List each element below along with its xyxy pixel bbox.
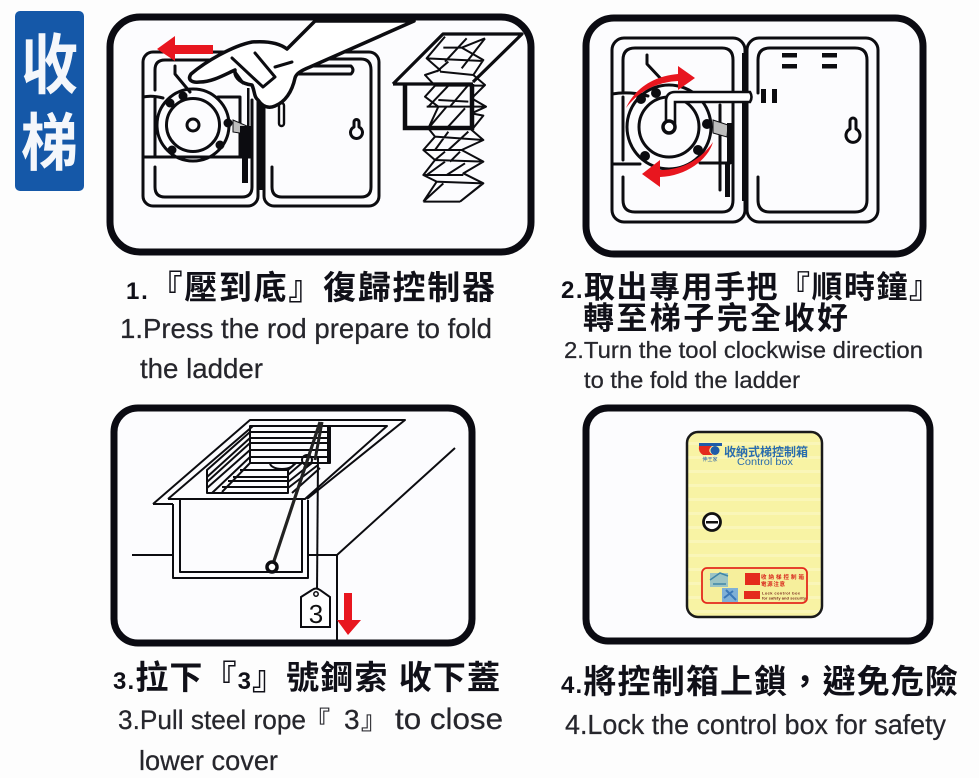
heading 2: 轉至梯子完全收好 bbox=[583, 301, 848, 336]
tag 3: 3 bbox=[309, 599, 323, 629]
left door bbox=[612, 38, 745, 222]
tag 3 bbox=[301, 588, 330, 629]
panel: step 3 pull steel rope bbox=[114, 408, 472, 643]
caption 3: 3 bbox=[344, 704, 360, 735]
logo: 伸王家 bbox=[702, 456, 718, 463]
panel: step 1 press the rod bbox=[110, 17, 531, 252]
red down arrow bbox=[337, 593, 361, 635]
folded ladder frame bbox=[393, 34, 522, 202]
heading 2: 2.取出專用手把『順時鐘』 bbox=[561, 270, 940, 305]
warning label bbox=[702, 568, 807, 603]
red clockwise arrow: bottom bbox=[642, 142, 713, 187]
hand pressing bbox=[190, 21, 414, 107]
caption 2 bbox=[564, 337, 923, 393]
caption 3: to close bbox=[395, 703, 503, 736]
badge: 收梯 (fold ladder): 收 bbox=[21, 29, 78, 103]
left door bbox=[143, 52, 258, 206]
ceiling frame bbox=[153, 420, 405, 504]
lock bbox=[704, 514, 720, 530]
hinge bbox=[742, 53, 748, 201]
control box bbox=[687, 432, 822, 617]
caption 1: 1.Press the rod prepare to fold bbox=[120, 313, 492, 344]
right door bbox=[747, 38, 878, 222]
box title: 收納式梯控制箱 bbox=[724, 444, 808, 459]
logo bbox=[699, 443, 722, 463]
right door bbox=[264, 52, 379, 206]
ladder zigzag folds bbox=[423, 37, 486, 202]
heading 3: 3.拉下『3』號鋼索 收下蓋 bbox=[113, 659, 500, 696]
panel: step 4 control box bbox=[586, 408, 930, 641]
heading 2 bbox=[561, 270, 940, 336]
badge: 收梯 (fold ladder): 梯 bbox=[21, 108, 78, 179]
panel: step 2 turn the tool bbox=[586, 18, 923, 254]
caption 1: the ladder bbox=[140, 353, 263, 384]
warning label: Lock control box bbox=[762, 590, 801, 596]
caption 2: 2.Turn the tool clockwise direction bbox=[564, 337, 923, 363]
hand finger creases bbox=[232, 53, 292, 87]
caption 3: 』 bbox=[361, 707, 386, 735]
caption 3: 『 bbox=[305, 707, 330, 735]
caption 3 bbox=[118, 703, 503, 776]
box subtitle: Control box bbox=[737, 457, 793, 468]
folded ladder stack bbox=[207, 426, 330, 493]
badge: 收梯 (fold ladder) bbox=[15, 11, 84, 191]
heading 4: 4.將控制箱上鎖，避免危險 bbox=[561, 663, 958, 700]
caption 1 bbox=[120, 313, 492, 384]
warning label: for safety and security bbox=[762, 596, 807, 600]
access box bbox=[173, 499, 308, 578]
pole and rope bbox=[272, 422, 320, 567]
wall lines bbox=[132, 448, 455, 640]
keyhole bbox=[846, 118, 860, 142]
caption 3: 3.Pull steel rope bbox=[118, 705, 306, 735]
caption 2: to the fold the ladder bbox=[584, 367, 800, 393]
warning label: 收納梯控制箱 bbox=[761, 573, 804, 581]
caption 4: 4.Lock the control box for safety bbox=[565, 709, 946, 740]
warning label: 電源注意 bbox=[761, 580, 785, 588]
heading 1: 1.『壓到底』復歸控制器 bbox=[126, 269, 495, 306]
red clockwise arrow: top bbox=[626, 66, 695, 108]
tool handle bbox=[666, 92, 752, 126]
hinge bbox=[259, 98, 264, 190]
caption 3: lower cover bbox=[139, 745, 278, 776]
red arrow bbox=[157, 36, 213, 61]
